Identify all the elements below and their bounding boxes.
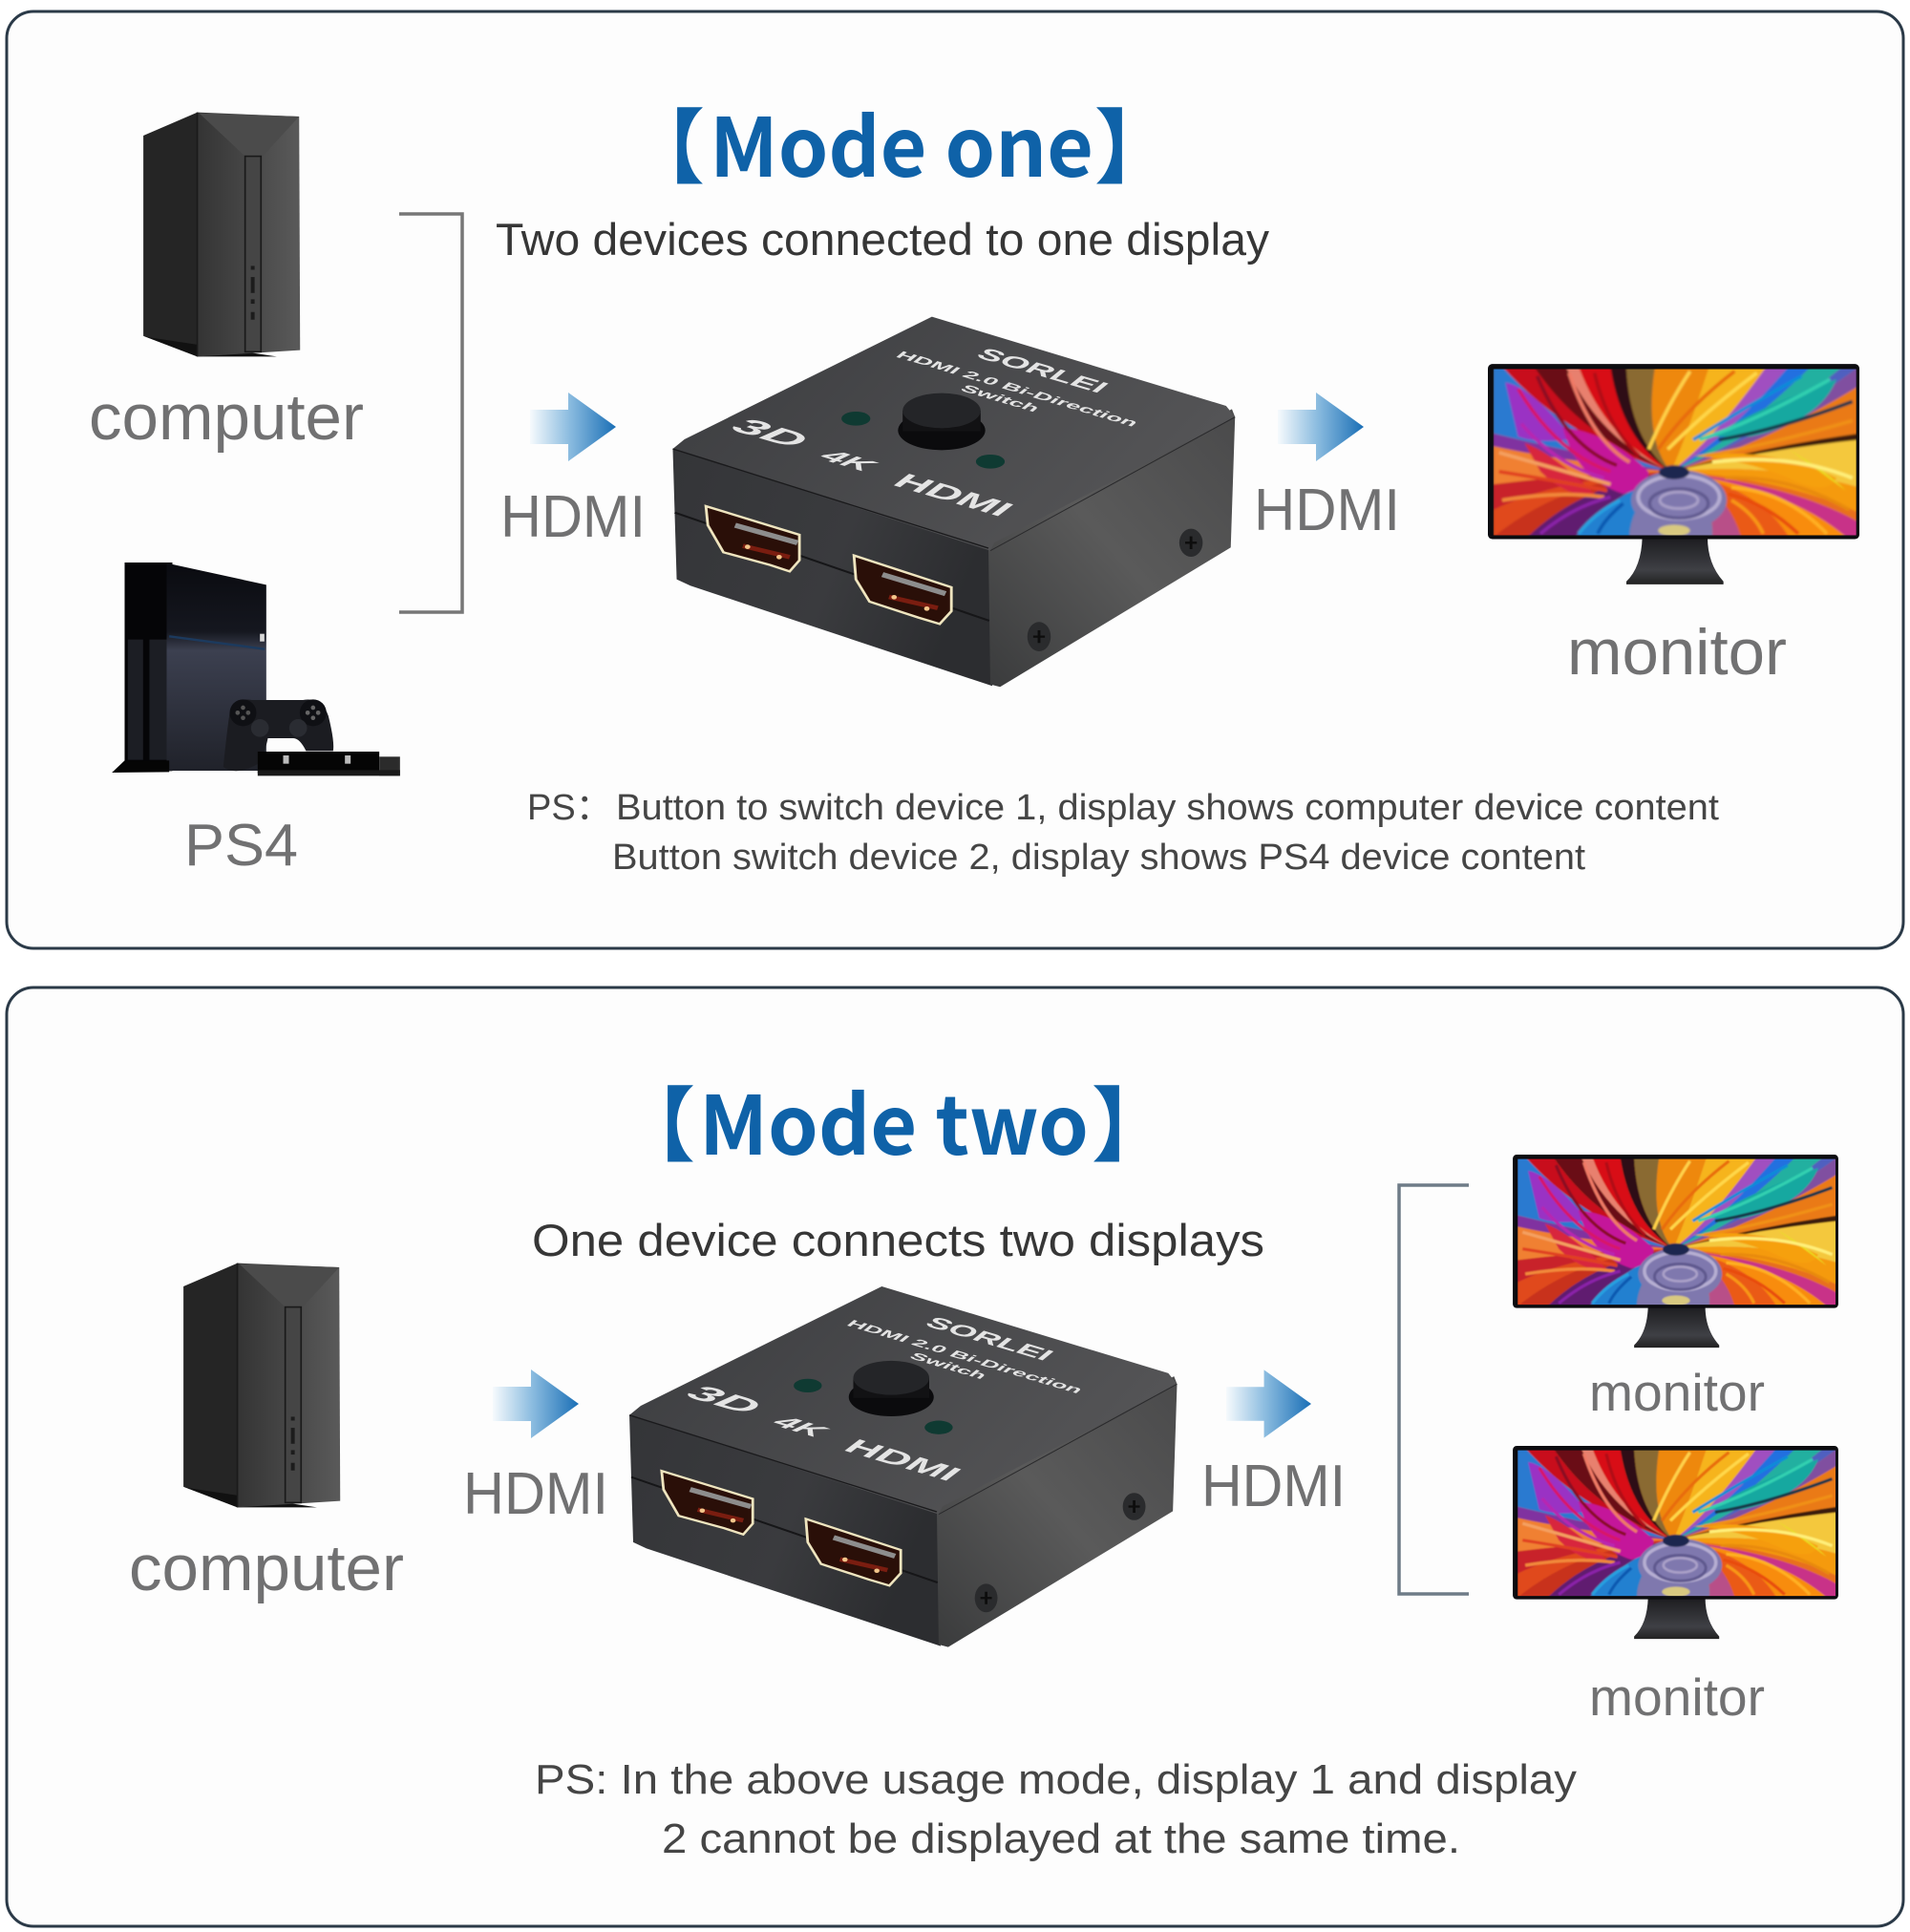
subtitle: two devices: Two devices connected to one display [496, 214, 1270, 265]
device: HDMI switch: HDMI [886, 470, 1020, 520]
arrow: output [1278, 393, 1364, 461]
panel frame: mode two [7, 987, 1903, 1926]
label: monitor one: monitor [1589, 1363, 1765, 1422]
device: HDMI switch: SORLEI [971, 345, 1114, 396]
device: HDMI switch [629, 1286, 1177, 1647]
bracket joining displays [1399, 1185, 1469, 1594]
subtitle: one device: One device connects two displays [532, 1215, 1264, 1265]
note: display limitation [535, 1756, 1577, 1862]
title: Mode one: 】 [1094, 83, 1176, 201]
icon: monitor two [1513, 1446, 1838, 1639]
note: switching [527, 788, 1719, 878]
label: HDMI input: HDMI [463, 1461, 608, 1527]
label: computer: computer [89, 381, 364, 454]
device: HDMI switch: Switch [905, 1350, 990, 1381]
arrow: input [493, 1369, 579, 1438]
title: Mode two: 】 [1092, 1061, 1173, 1178]
device: HDMI switch: 4K [813, 446, 884, 477]
icon: monitor [1488, 364, 1859, 584]
note: display limitation: PS: In the above usage mode, display 1 and display [535, 1756, 1577, 1803]
label: PS4: PS4 [184, 813, 298, 879]
label: HDMI output: HDMI [1254, 478, 1400, 543]
note: switching: Button switch device 2, display shows PS4 device content [612, 838, 1585, 878]
icon: computer tower [183, 1263, 340, 1507]
device: HDMI switch: 3D [679, 1381, 769, 1419]
icon: computer tower [143, 113, 300, 356]
device: HDMI switch [672, 317, 1235, 687]
bracket joining inputs [399, 214, 462, 612]
label: HDMI input: HDMI [500, 484, 646, 550]
label: computer: computer [129, 1532, 404, 1604]
arrow: input [530, 393, 616, 461]
title: Mode one: Mode one [710, 83, 1093, 201]
label: HDMI output: HDMI [1201, 1454, 1346, 1519]
icon: PS4 console [112, 563, 400, 775]
note: switching: PS： [527, 788, 612, 828]
panel: mode one [7, 11, 1903, 948]
label: monitor: monitor [1567, 616, 1787, 689]
panel frame: mode one [7, 11, 1903, 948]
note: switching: Button to switch device 1, display shows computer device content [616, 788, 1719, 828]
icon: monitor one [1513, 1155, 1838, 1348]
title: Mode two: 【 [614, 1061, 695, 1178]
device: HDMI switch: HDMI [837, 1435, 967, 1485]
label: monitor two: monitor [1589, 1667, 1765, 1727]
device: HDMI switch: Switch [957, 383, 1043, 414]
device: HDMI switch: SORLEI [920, 1314, 1058, 1364]
device: HDMI switch: 3D [724, 414, 817, 453]
note: display limitation: 2 cannot be displayed at the same time. [662, 1815, 1460, 1862]
title: Mode two: Mode two [699, 1061, 1089, 1178]
device: HDMI switch: 4K [766, 1412, 834, 1442]
device: HDMI switch: HDMI 2.0 Bi-Direction [892, 350, 1141, 429]
device: HDMI switch: HDMI 2.0 Bi-Direction [843, 1318, 1086, 1396]
title: Mode one: 【 [624, 83, 705, 201]
panel: mode two [7, 987, 1903, 1926]
arrow: output [1226, 1369, 1311, 1438]
